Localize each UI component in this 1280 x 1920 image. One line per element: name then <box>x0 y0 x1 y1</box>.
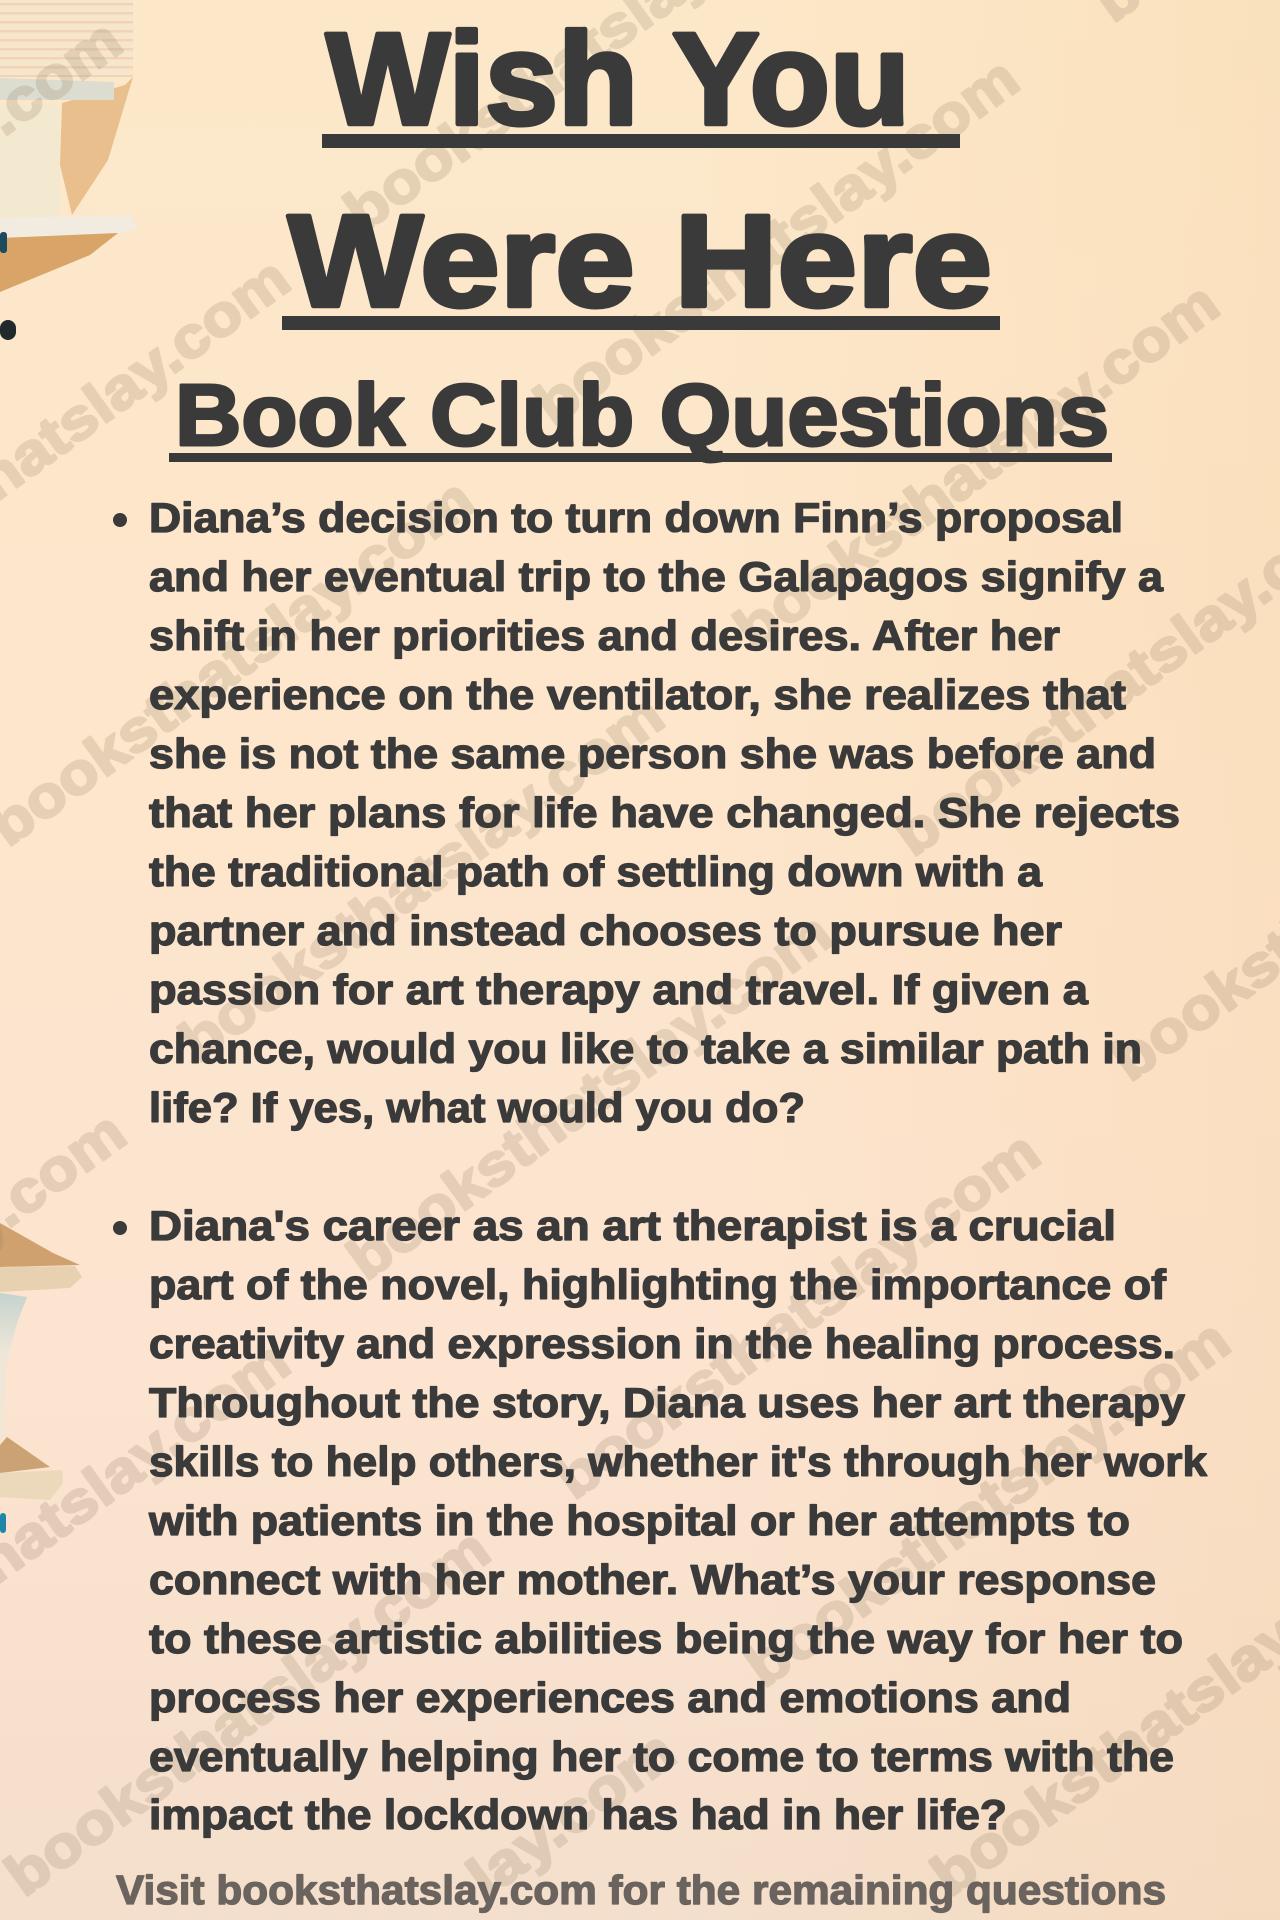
watermark: repeated booksthatslay.com: booksthatslay.com <box>168 682 675 1075</box>
decorative book stack, lower left <box>0 1223 82 1533</box>
question 2 text: Throughout the story, Diana uses her art therapy <box>149 1379 1186 1426</box>
question 2 text: connect with her mother. What’s your response <box>149 1556 1156 1603</box>
question 2 text: impact the lockdown has had in her life? <box>149 1791 1007 1838</box>
question 2 text: with patients in the hospital or her attempts to <box>148 1497 1130 1544</box>
footer call to action: Visit booksthatslay.com for the remaining questions <box>116 1867 1166 1913</box>
title: Wish You: Wish You <box>326 5 910 152</box>
subtitle: Book Club Questions: Book Club Questions <box>175 367 1109 464</box>
question 2 text <box>148 1202 1208 1838</box>
question 2 <box>113 1202 1208 1838</box>
question 1 <box>113 494 1180 1131</box>
question 1 text: life? If yes, what would you do? <box>149 1084 805 1131</box>
title: Were Here: Were Here <box>288 187 992 334</box>
bullet 1 <box>113 513 127 527</box>
watermark: repeated booksthatslay.com: booksthatslay.com <box>734 1307 1241 1700</box>
question 1 text: and her eventual trip to the Galapagos signify a <box>149 553 1164 600</box>
question 2 text: skills to help others, whether it's through her work <box>149 1438 1208 1485</box>
question 1 text: that her plans for life have changed. She rejects <box>149 789 1180 836</box>
question 1 text: the traditional path of settling down with a <box>149 848 1043 895</box>
question 2 text: eventually helping her to come to terms with the <box>149 1733 1174 1780</box>
question 2 text: Diana's career as an art therapist is a crucial <box>149 1202 1116 1249</box>
question 1 text: passion for art therapy and travel. If given a <box>149 966 1089 1013</box>
watermark: repeated booksthatslay.com: booksthatslay.com <box>723 270 1230 663</box>
watermark: repeated booksthatslay.com: booksthatslay.com <box>544 1119 1051 1512</box>
question 1 text: experience on the ventilator, she realizes that <box>149 671 1126 718</box>
watermark: repeated booksthatslay.com: lay.com <box>456 1718 687 1911</box>
question 1 text: shift in her priorities and desires. After her <box>149 612 1060 659</box>
question 2 text: process her experiences and emotions and <box>149 1674 1071 1721</box>
question 1 text: partner and instead chooses to pursue her <box>149 907 1062 954</box>
watermark: repeated booksthatslay.com: booksthatslay.com <box>523 45 1030 438</box>
decorative book stack, top left <box>0 0 138 340</box>
question 2 text: creativity and expression in the healing process. <box>149 1320 1175 1367</box>
watermark: repeated booksthatslay.com: booksthatslay.com <box>0 1516 501 1909</box>
bullet 2 <box>113 1221 127 1235</box>
question 2 text: to these artistic abilities being the way for her to <box>149 1615 1183 1662</box>
question 2 text: part of the novel, highlighting the importance of <box>149 1261 1167 1308</box>
question 1 text: chance, would you like to take a similar path in <box>149 1025 1142 1072</box>
watermark: repeated booksthatslay.com: booksthatslay.com <box>336 900 843 1293</box>
question 1 text <box>149 494 1180 1131</box>
question 1 text: Diana’s decision to turn down Finn’s proposal <box>149 494 1123 541</box>
question 1 text: she is not the same person she was before and <box>149 730 1156 777</box>
